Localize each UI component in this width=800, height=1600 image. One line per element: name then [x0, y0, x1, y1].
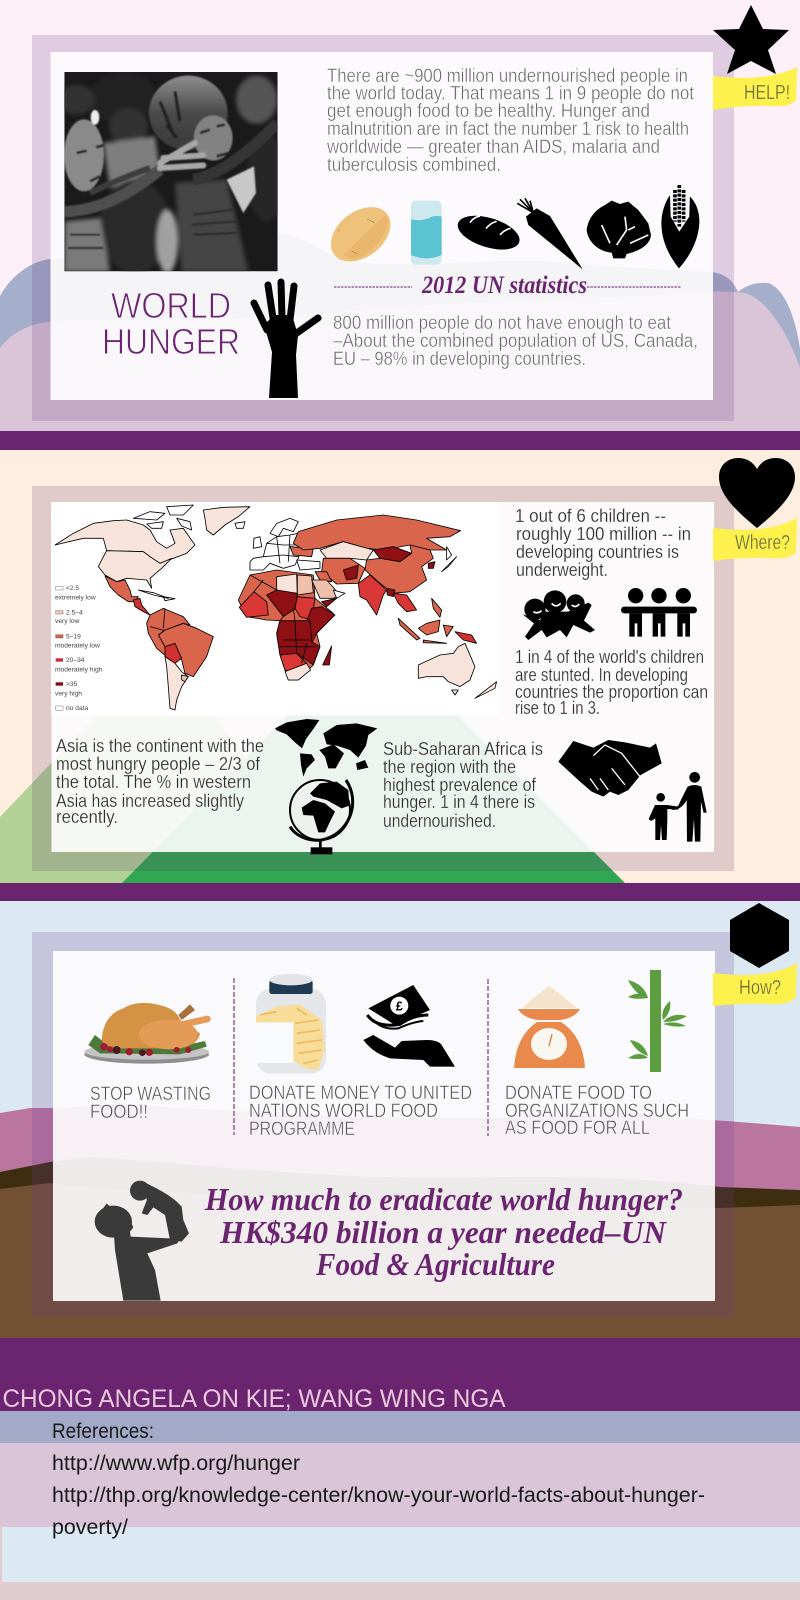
panel: section 1 inner card [50, 52, 713, 400]
legend: map legend [55, 585, 103, 712]
dashed column dividers [234, 978, 488, 1136]
text: stop wasting food: FOOD!! [90, 1102, 148, 1123]
icon: artichoke veins [602, 217, 648, 245]
text: references: poverty/ [52, 1516, 128, 1539]
legend: map legend: moderately high [55, 666, 103, 673]
text: donate food [505, 1083, 689, 1139]
legend: map legend: 20–34 [66, 657, 85, 664]
text: Asia paragraph: the total. The % in western [56, 772, 251, 792]
icon: black world map [275, 719, 377, 777]
map region: Africa [238, 570, 335, 680]
icon: potato [320, 196, 401, 273]
text: underweight children: underweight. [516, 560, 608, 580]
text: stunted children [515, 647, 708, 718]
text: intro paragraph: tuberculosis combined. [327, 155, 501, 176]
headline: cost to eradicate hunger [204, 1181, 683, 1282]
panel: footer bands [0, 1338, 800, 1600]
text: Asia paragraph: Asia has increased slightly [56, 791, 244, 811]
panel: section 2 outer frame [32, 486, 734, 871]
icon: artichoke [587, 201, 651, 258]
icon: glass of water [411, 201, 442, 265]
text: stunted children: rise to 1 in 3. [515, 698, 600, 718]
text: Sub-Saharan Africa paragraph [383, 739, 543, 831]
legend: map legend: no data [66, 705, 89, 712]
icons: children groups [523, 588, 697, 640]
map: world hunger map [51, 502, 499, 715]
title: World Hunger: WORLD [111, 285, 231, 326]
icons: food row [320, 185, 699, 273]
callout: Where heart badge [713, 458, 797, 561]
text: underweight children [515, 506, 691, 580]
icon: hexagon [730, 903, 789, 968]
callout: How hexagon badge: How? [739, 977, 781, 999]
icon: coin jar [256, 974, 326, 1074]
icon: carrot [517, 198, 583, 269]
ribbon [713, 963, 797, 1006]
text: statistics paragraph: EU – 98% in developing countries. [333, 349, 586, 370]
icons: world silhouette and globe [275, 719, 377, 854]
text: Asia paragraph: Asia is the continent with the [56, 736, 264, 756]
divider band: first [0, 431, 800, 450]
map region: Europe [250, 518, 302, 570]
text: statistics paragraph: 800 million people do not have enough to eat [333, 313, 672, 334]
text: intro paragraph: worldwide — greater than AIDS, malaria and [326, 137, 660, 158]
legend: map legend: extremely low [55, 595, 96, 602]
text: intro paragraph: malnutrition are in fact the number 1 risk to health [327, 119, 689, 140]
icon: father lifting baby [95, 1181, 189, 1301]
text: donate food: ORGANIZATIONS SUCH [505, 1101, 689, 1122]
legend: map legend: moderately low [55, 643, 100, 650]
map region: Latin America [105, 576, 213, 677]
map region: Australia [418, 643, 475, 687]
icons: handshake and parent with child [558, 740, 707, 842]
text: Sub-Saharan Africa paragraph: Sub-Saharan Africa is [383, 739, 543, 759]
callout: HELP star badge [713, 5, 797, 110]
text: statistics paragraph: –About the combined population of US, Canada, [333, 331, 698, 352]
map region: South-East Asia islands [398, 598, 453, 643]
legend: map legend: very low [55, 618, 80, 625]
ribbon [713, 518, 797, 561]
text: authors: CHONG ANGELA ON KIE; WANG WING NGA [2, 1385, 506, 1413]
text: intro paragraph: There are ~900 million undernourished people in [327, 66, 688, 87]
ribbon [713, 67, 797, 110]
panel: section 2 background [0, 450, 800, 883]
panel: section 3 background [0, 901, 800, 1339]
text: Asia paragraph: recently. [56, 807, 118, 827]
map region: Arctic islands and Caribbean [133, 505, 245, 601]
text: stunted children: 1 in 4 of the world's children [515, 647, 704, 667]
text: Sub-Saharan Africa paragraph: highest prevalence of [383, 775, 537, 795]
panel: section 2 inner card [52, 502, 714, 852]
icon: corn [661, 185, 699, 268]
map region: North America and Greenland [55, 507, 250, 588]
legend: map legend: 5–19 [66, 633, 81, 640]
icon: kitchen scale with flour [514, 986, 585, 1068]
panel: section 3 inner card [53, 951, 715, 1301]
map region: Russia and Asia [293, 515, 461, 550]
text: references: http://thp.org/knowledge-center/know-your-world-facts-about-hunger- [52, 1484, 705, 1507]
legend: map legend: 2.5–4 [66, 609, 83, 616]
text: Asia paragraph: most hungry people – 2/3 of [56, 754, 261, 774]
icon: roast turkey [84, 1003, 209, 1064]
panel: section 1 outer frame [32, 35, 734, 421]
text: intro paragraph [326, 66, 695, 176]
title: World Hunger: HUNGER [102, 321, 240, 362]
icon: three smiling children [523, 590, 595, 640]
text: stop wasting food [90, 1084, 211, 1123]
text: donate food: DONATE FOOD TO [505, 1083, 652, 1104]
icon: bread [454, 209, 524, 256]
text: references: http://www.wfp.org/hunger [52, 1452, 300, 1475]
icon: money into hand: £ [396, 999, 403, 1013]
text: Sub-Saharan Africa paragraph: hunger. 1 in 4 there is [383, 792, 535, 812]
headline: cost to eradicate hunger: HK$340 billion a year needed–UN [219, 1214, 668, 1250]
text: Sub-Saharan Africa paragraph: undernourished. [383, 811, 496, 831]
text: underweight children: developing countries is [516, 542, 679, 562]
text: statistics paragraph [333, 313, 698, 370]
text: underweight children: roughly 100 million -- in [516, 524, 691, 544]
icon: heart [719, 458, 795, 528]
icon: raised hand [254, 282, 318, 398]
panel: section 3 outer frame [32, 932, 734, 1317]
text: donate money: PROGRAMME [249, 1119, 355, 1140]
legend: map legend: <2.5 [66, 585, 79, 592]
text: Sub-Saharan Africa paragraph: the region with the [383, 757, 516, 777]
icon: desk globe [290, 780, 353, 854]
icons: turkey, jar and money [84, 974, 455, 1074]
text: donate money [249, 1083, 472, 1140]
icon: money into hand [363, 985, 455, 1067]
heading: 2012 UN statistics: 2012 UN statistics [421, 272, 587, 299]
text: underweight children: 1 out of 6 children -- [515, 506, 666, 526]
headline: cost to eradicate hunger: How much to eradicate world hunger? [204, 1181, 683, 1217]
icon: handshake [558, 740, 662, 797]
text: donate food: AS FOOD FOR ALL [505, 1118, 650, 1139]
text: donate money: NATIONS WORLD FOOD [249, 1101, 438, 1122]
title: World Hunger [102, 285, 240, 362]
text: stop wasting food: STOP WASTING [90, 1084, 211, 1105]
photo: hungry children [58, 72, 287, 273]
headline: cost to eradicate hunger: Food & Agriculture [315, 1246, 555, 1282]
text: stunted children: countries the proportion can [515, 682, 708, 702]
text: references: References: [52, 1420, 154, 1443]
text: intro paragraph: the world today. That means 1 in 9 people do not [327, 84, 695, 104]
divider band: second [0, 883, 800, 901]
text: donate money: DONATE MONEY TO UNITED [249, 1083, 472, 1104]
text: intro paragraph: get enough food to be healthy. Hunger and [327, 101, 650, 122]
callout: How hexagon badge [713, 903, 797, 1006]
text: Asia paragraph [56, 736, 264, 827]
panel: section 1 background [0, 0, 800, 432]
legend: map legend: very high [55, 690, 82, 697]
legend: map legend: >35 [66, 681, 78, 688]
icon: parent and child [649, 772, 707, 842]
icon: star [713, 5, 789, 74]
icon: three linked figures [621, 588, 697, 637]
text: references [52, 1420, 705, 1539]
text: stunted children: are stunted. In developing [515, 665, 688, 685]
icon: bamboo [628, 970, 687, 1072]
